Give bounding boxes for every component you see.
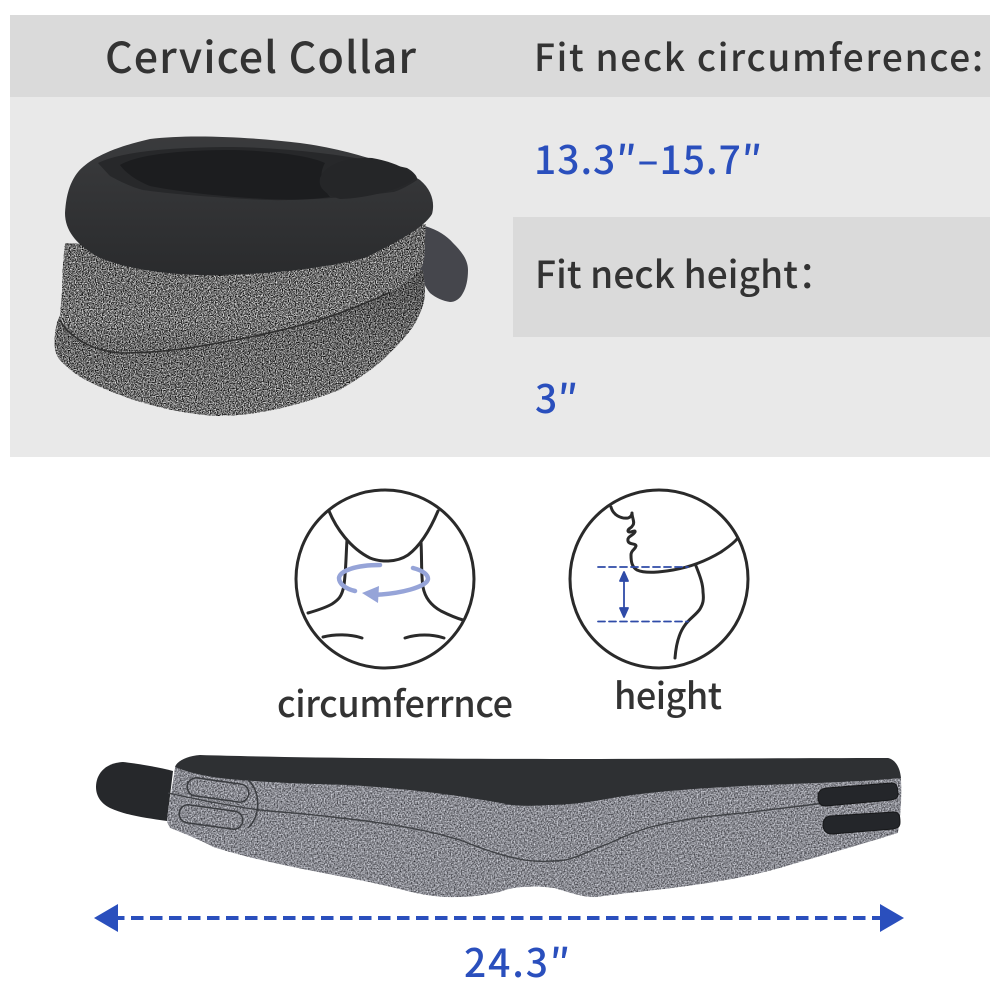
circle outline [296, 490, 474, 668]
roll seam [60, 292, 390, 353]
shoulder marks [323, 635, 444, 638]
band: neck height row [513, 217, 990, 337]
diagram: height [570, 490, 748, 668]
face and jaw line [611, 507, 737, 572]
strap gray body [167, 767, 901, 897]
right strap pads [818, 783, 900, 834]
top black roll [65, 136, 433, 275]
strap seam [168, 793, 823, 861]
circle outline [570, 490, 748, 668]
label: height: height [614, 668, 722, 720]
diagram: circumference [296, 490, 474, 668]
lower gray roll [54, 270, 425, 416]
left strap slots [178, 777, 258, 830]
middle gray roll [60, 224, 426, 353]
header band [10, 15, 990, 97]
product photo: flat collar strap [96, 755, 901, 897]
head and collar line [329, 511, 438, 561]
value: length: 24.3″ [464, 933, 570, 989]
left neck line [308, 540, 347, 613]
product photo: collar [54, 136, 468, 416]
heading: fit neck circumference: Fit neck circumference: [534, 28, 983, 82]
length arrow [94, 904, 904, 932]
heading: fit neck height: Fit neck height： [535, 245, 835, 299]
neck line [675, 566, 703, 658]
collar inner rim [98, 147, 417, 200]
title: Cervicel Collar [105, 24, 416, 86]
panel: specification background [10, 15, 990, 457]
strap dark top [175, 755, 901, 806]
strap left tab [96, 762, 173, 821]
value: circumference range: 13.3″–15.7″ [534, 130, 762, 186]
label: circumference: circumferrnce [277, 676, 513, 728]
circumference arrow [339, 565, 428, 603]
collar tab [420, 226, 468, 302]
height markers [598, 567, 688, 622]
collar inner opening [120, 150, 330, 200]
inner chin pad [320, 158, 415, 199]
value: neck height: 3″ [535, 369, 578, 425]
right neck line [421, 542, 463, 620]
